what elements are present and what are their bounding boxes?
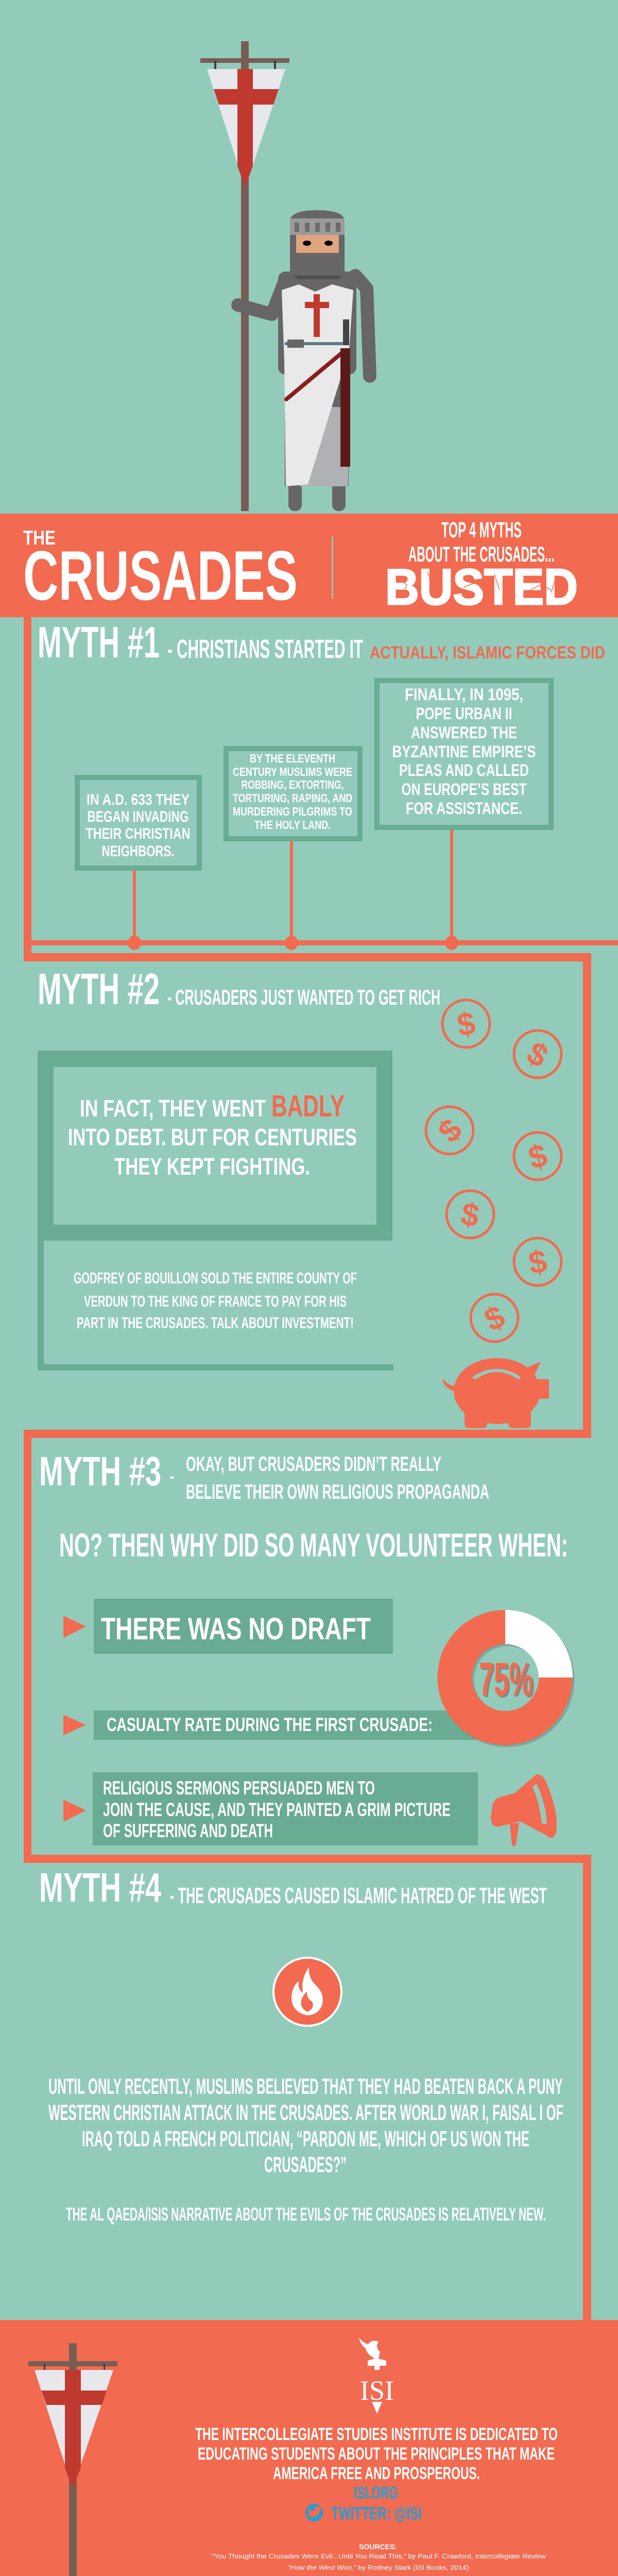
box: 1095: FOR ASSISTANCE. [406,799,522,818]
bullet: no draft [63,1599,393,1654]
heading myth 1: - CHRISTIANS STARTED IT [167,634,363,664]
icons: falling coins: $ [479,1299,510,1338]
callout box: badly into debt: INTO DEBT. BUT FOR CENTURIES [68,1124,357,1150]
panel: myth 2 [38,965,561,1428]
box: AD 633: IN A.D. 633 THEY [87,791,190,808]
title: the crusades: THE [23,527,56,549]
callout box: badly into debt: THEY KEPT FIGHTING. [114,1153,310,1180]
banner pole [200,41,289,511]
knight figure [238,210,370,511]
bullet: sermons: RELIGIOUS SERMONS PERSUADED MEN TO [103,1777,375,1799]
box: eleventh century: THE HOLY LAND. [254,818,331,832]
footer [0,2320,618,2576]
box: 1095: BYZANTINE EMPIRE’S [392,742,536,761]
subtitle: top 4 myths busted: TOP 4 MYTHS [441,518,522,543]
icon: fire [273,1958,341,2026]
text block: godfrey: GODFREY OF BOUILLON SOLD THE ENTIRE COUNTY OF [74,1269,357,1287]
bullet: sermons [63,1772,478,1845]
bullet: no draft: THERE WAS NO DRAFT [101,1612,371,1646]
heading myth 2 [38,965,440,1014]
panel: myth 3 [39,1448,575,1846]
bullet: casualty rate: CASUALTY RATE DURING THE FIRST CRUSADE: [107,1714,433,1735]
icon: footer banner [28,2343,117,2576]
illustration: crusader knight with banner [200,41,370,511]
title: the crusades [23,527,298,615]
text block: godfrey: VERDUN TO THE KING OF FRANCE TO PAY FOR HIS [84,1292,347,1310]
links: website and twitter: TWITTER: @ISI [331,2504,422,2523]
icons: falling coins: $ [521,1035,554,1075]
icons: falling coins: $ [526,1244,550,1281]
icons: falling coins: $ [458,1196,482,1234]
box: eleventh century: ROBBING, EXTORTING, [241,778,344,791]
bullet: casualty rate [63,1710,485,1740]
donut chart: 75%: 75% [479,1653,533,1706]
timeline [31,830,618,950]
subtitle: top 4 myths busted: BUSTED [385,558,578,615]
text block: ISI mission [195,2425,558,2483]
subtitle: top 4 myths busted [385,518,578,615]
box: eleventh century: CENTURY MUSLIMS WERE [233,765,352,778]
sources: “You Thought the Crusades Were Evil...Until You Read This,” by Paul F. Crawford, Intercollegiate Review [212,2552,547,2560]
callout box: badly into debt [38,1050,392,1241]
logo: ISI [359,2337,394,2414]
text block: godfrey [38,1241,393,1370]
bullet: sermons: JOIN THE CAUSE, AND THEY PAINTED A GRIM PICTURE [103,1799,451,1820]
title: the crusades: CRUSADES [23,536,298,615]
box: eleventh century: BY THE ELEVENTH [250,752,335,765]
heading myth 1: MYTH #1 [38,618,160,667]
callout box: badly into debt: BADLY [271,1089,345,1123]
icons: falling coins: $ [525,1138,551,1176]
box: eleventh century: MURDERING PILGRIMS TO [233,805,352,818]
callout box: badly into debt: IN FACT, THEY WENT [80,1095,266,1122]
icons: falling coins: $ [454,1006,478,1043]
sources: SOURCES: [359,2543,397,2551]
box: AD 633: THEIR CHRISTIAN [85,825,191,842]
box: AD 633: BEGAN INVADING [88,808,188,825]
text block: ISI mission: AMERICA FREE AND PROSPEROUS. [273,2464,480,2483]
icon: piggy bank [443,1358,549,1428]
bullet: sermons: OF SUFFERING AND DEATH [103,1820,273,1841]
text block: faisal quote [48,2074,563,2177]
heading myth 4: MYTH #4 [39,1865,161,1910]
box: 1095: PLEAS AND CALLED [399,761,529,779]
box: eleventh century [226,749,360,839]
box: 1095: FINALLY, IN 1095, [405,685,523,704]
links: website and twitter [305,2483,422,2523]
heading myth 1 [38,618,605,667]
box: 1095: ON EUROPE’S BEST [402,780,527,799]
heading myth 4 [39,1865,547,1910]
box: eleventh century: TORTURING, RAPING, AND [233,791,352,805]
text block: godfrey: PART IN THE CRUSADES. TALK ABOUT INVESTMENT! [77,1314,354,1332]
icons: falling coins: $ [431,1112,469,1150]
heading myth 2: MYTH #2 [38,965,160,1014]
heading myth 3 [39,1448,489,1503]
donut chart: 75%: 75% [480,1655,535,1707]
panel: myth 4 [39,1865,563,2225]
box: 1095: ANSWERED THE [411,723,517,742]
heading myth 3: MYTH #3 [39,1448,161,1494]
heading myth 2: - CRUSADERS JUST WANTED TO GET RICH [167,985,440,1009]
box: AD 633: NEIGHBORS. [102,843,174,860]
heading myth 3: OKAY, BUT CRUSADERS DIDN’T REALLY [186,1453,441,1476]
icons: falling coins [426,1000,561,1342]
box: 1095 [377,681,551,827]
frame lines [24,617,591,2320]
header banner [0,514,618,617]
donut chart: 75% [438,1610,575,1747]
box: 1095: POPE URBAN II [416,704,512,723]
links: website and twitter: ISI.ORG [354,2483,398,2503]
sources: “How the West Won,” by Rodney Stark (ISI Books, 2014) [288,2564,469,2571]
text block: faisal quote: CRUSADES?” [264,2153,347,2177]
logo: ISI: ISI [360,2375,394,2406]
panel: myth 1 [31,618,618,950]
box: AD 633 [77,777,199,868]
sources [212,2543,547,2571]
icon: megaphone [491,1774,557,1846]
